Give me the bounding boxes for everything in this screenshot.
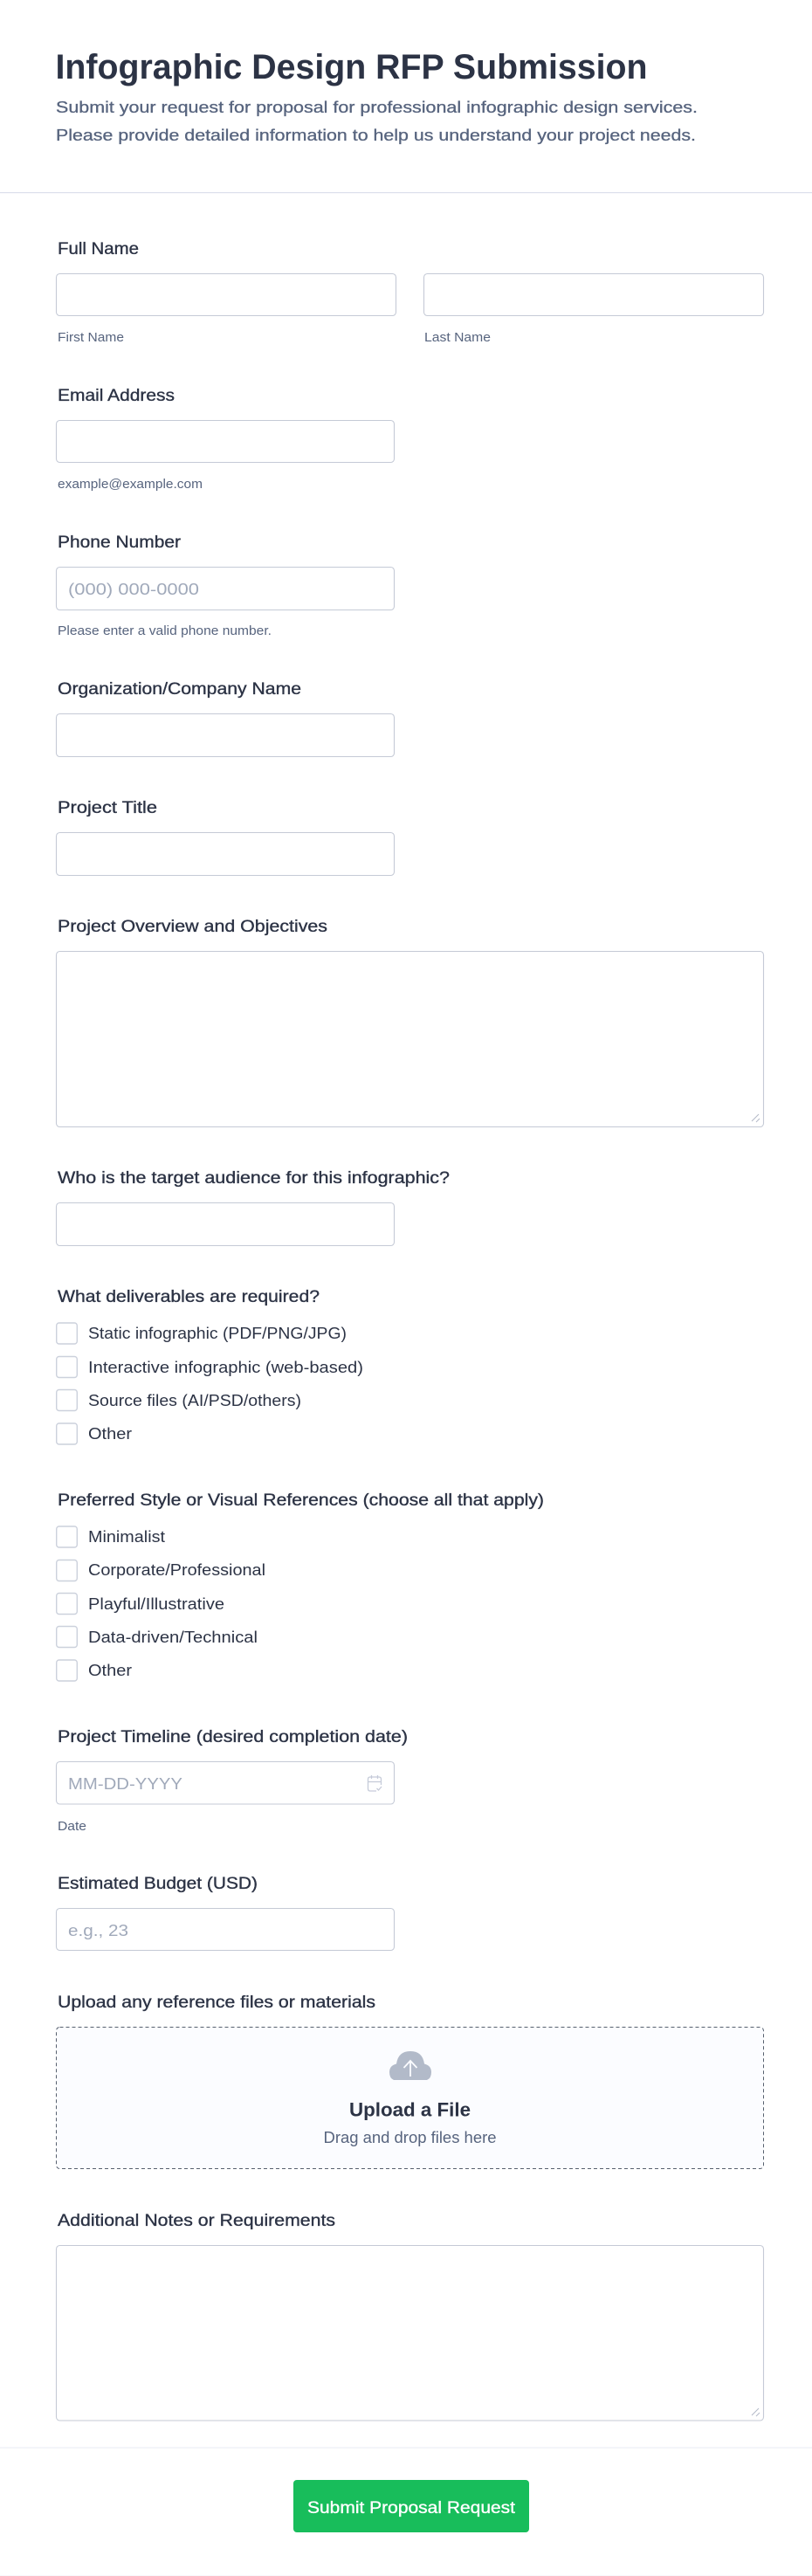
placeholder: budget: e.g., 23 bbox=[68, 1921, 128, 1939]
field: file upload bbox=[56, 1994, 763, 2169]
input: date bbox=[56, 1762, 395, 1804]
input: budget bbox=[56, 1909, 395, 1951]
option: static: Static infographic (PDF/PNG/JPG) bbox=[88, 1325, 347, 1342]
label: full name: Full Name bbox=[58, 240, 139, 258]
label: deliverables: What deliverables are required? bbox=[58, 1288, 320, 1306]
checkbox: other bbox=[57, 1660, 77, 1681]
option: playful: Playful/Illustrative bbox=[88, 1595, 224, 1613]
checkbox: corporate bbox=[57, 1560, 77, 1581]
field: phone bbox=[56, 534, 395, 638]
subtitle line 2: Please provide detailed information to help us understand your project needs. bbox=[56, 126, 696, 144]
field: preferred style bbox=[57, 1491, 544, 1681]
checkbox: minimalist bbox=[57, 1526, 77, 1547]
upload hint: Drag and drop files here bbox=[323, 2129, 496, 2146]
input: email bbox=[56, 421, 395, 463]
field: project title bbox=[56, 799, 395, 875]
field: project timeline bbox=[56, 1728, 408, 1834]
field: target audience bbox=[56, 1169, 450, 1245]
label: organization: Organization/Company Name bbox=[58, 680, 301, 699]
checkbox: source files bbox=[57, 1390, 77, 1411]
input: last name bbox=[424, 274, 763, 316]
input: organization bbox=[56, 714, 395, 756]
option: data-driven: Data-driven/Technical bbox=[88, 1629, 258, 1646]
label: project timeline: Project Timeline (desired completion date) bbox=[58, 1728, 408, 1746]
submit button: Submit Proposal Request bbox=[307, 2499, 516, 2517]
header bbox=[56, 48, 698, 144]
checkbox: static bbox=[57, 1323, 77, 1344]
label: additional notes: Additional Notes or Requirements bbox=[58, 2212, 335, 2230]
upload heading: Upload a File bbox=[349, 2099, 471, 2120]
label: file upload: Upload any reference files or materials bbox=[58, 1994, 375, 2012]
label: phone: Phone Number bbox=[58, 534, 182, 552]
subtitle line 1: Submit your request for proposal for professional infographic design services. bbox=[56, 98, 698, 116]
input: project title bbox=[56, 833, 395, 875]
label: project title: Project Title bbox=[58, 799, 157, 817]
option: interactive: Interactive infographic (web-based) bbox=[88, 1359, 363, 1376]
label: preferred style: Preferred Style or Visual References (choose all that apply) bbox=[58, 1491, 544, 1510]
textarea: additional notes bbox=[56, 2246, 763, 2421]
option: source files: Source files (AI/PSD/others) bbox=[88, 1392, 301, 1409]
option: other: Other bbox=[88, 1425, 132, 1443]
helper: email: example@example.com bbox=[58, 478, 203, 492]
submit button bbox=[293, 2480, 529, 2532]
placeholder: date: MM-DD-YYYY bbox=[68, 1774, 182, 1793]
checkbox: data-driven bbox=[57, 1626, 77, 1647]
option: other: Other bbox=[88, 1662, 132, 1679]
checkbox: other bbox=[57, 1423, 77, 1444]
field: full name bbox=[56, 240, 763, 345]
field: estimated budget bbox=[56, 1875, 395, 1951]
title: Infographic Design RFP Submission bbox=[56, 48, 648, 86]
placeholder: phone: (000) 000-0000 bbox=[68, 580, 199, 598]
option: minimalist: Minimalist bbox=[88, 1528, 165, 1546]
sublabel: first name: First Name bbox=[58, 331, 124, 345]
resize grip bbox=[752, 2408, 760, 2416]
icon: cloud upload bbox=[389, 2051, 431, 2080]
label: estimated budget: Estimated Budget (USD) bbox=[58, 1875, 258, 1893]
checkbox: playful bbox=[57, 1593, 77, 1614]
resize grip bbox=[752, 1114, 760, 1122]
label: target audience: Who is the target audience for this infographic? bbox=[58, 1169, 450, 1188]
field: additional notes bbox=[56, 2212, 763, 2421]
sublabel: last name: Last Name bbox=[424, 331, 491, 345]
field: email bbox=[56, 387, 395, 492]
field: deliverables bbox=[57, 1288, 363, 1444]
textarea: project overview bbox=[56, 952, 763, 1126]
field: project overview bbox=[56, 918, 763, 1126]
label: project overview: Project Overview and Objectives bbox=[58, 918, 327, 936]
field: organization bbox=[56, 680, 395, 756]
label: email: Email Address bbox=[58, 387, 175, 405]
input: target audience bbox=[56, 1203, 395, 1245]
dropzone bbox=[56, 2028, 763, 2169]
sublabel: date: Date bbox=[58, 1820, 86, 1834]
helper: phone: Please enter a valid phone number. bbox=[58, 624, 272, 638]
icon: calendar bbox=[368, 1775, 382, 1791]
option: corporate: Corporate/Professional bbox=[88, 1561, 265, 1579]
input: first name bbox=[56, 274, 396, 316]
input: phone bbox=[56, 568, 395, 610]
checkbox: interactive bbox=[57, 1357, 77, 1378]
